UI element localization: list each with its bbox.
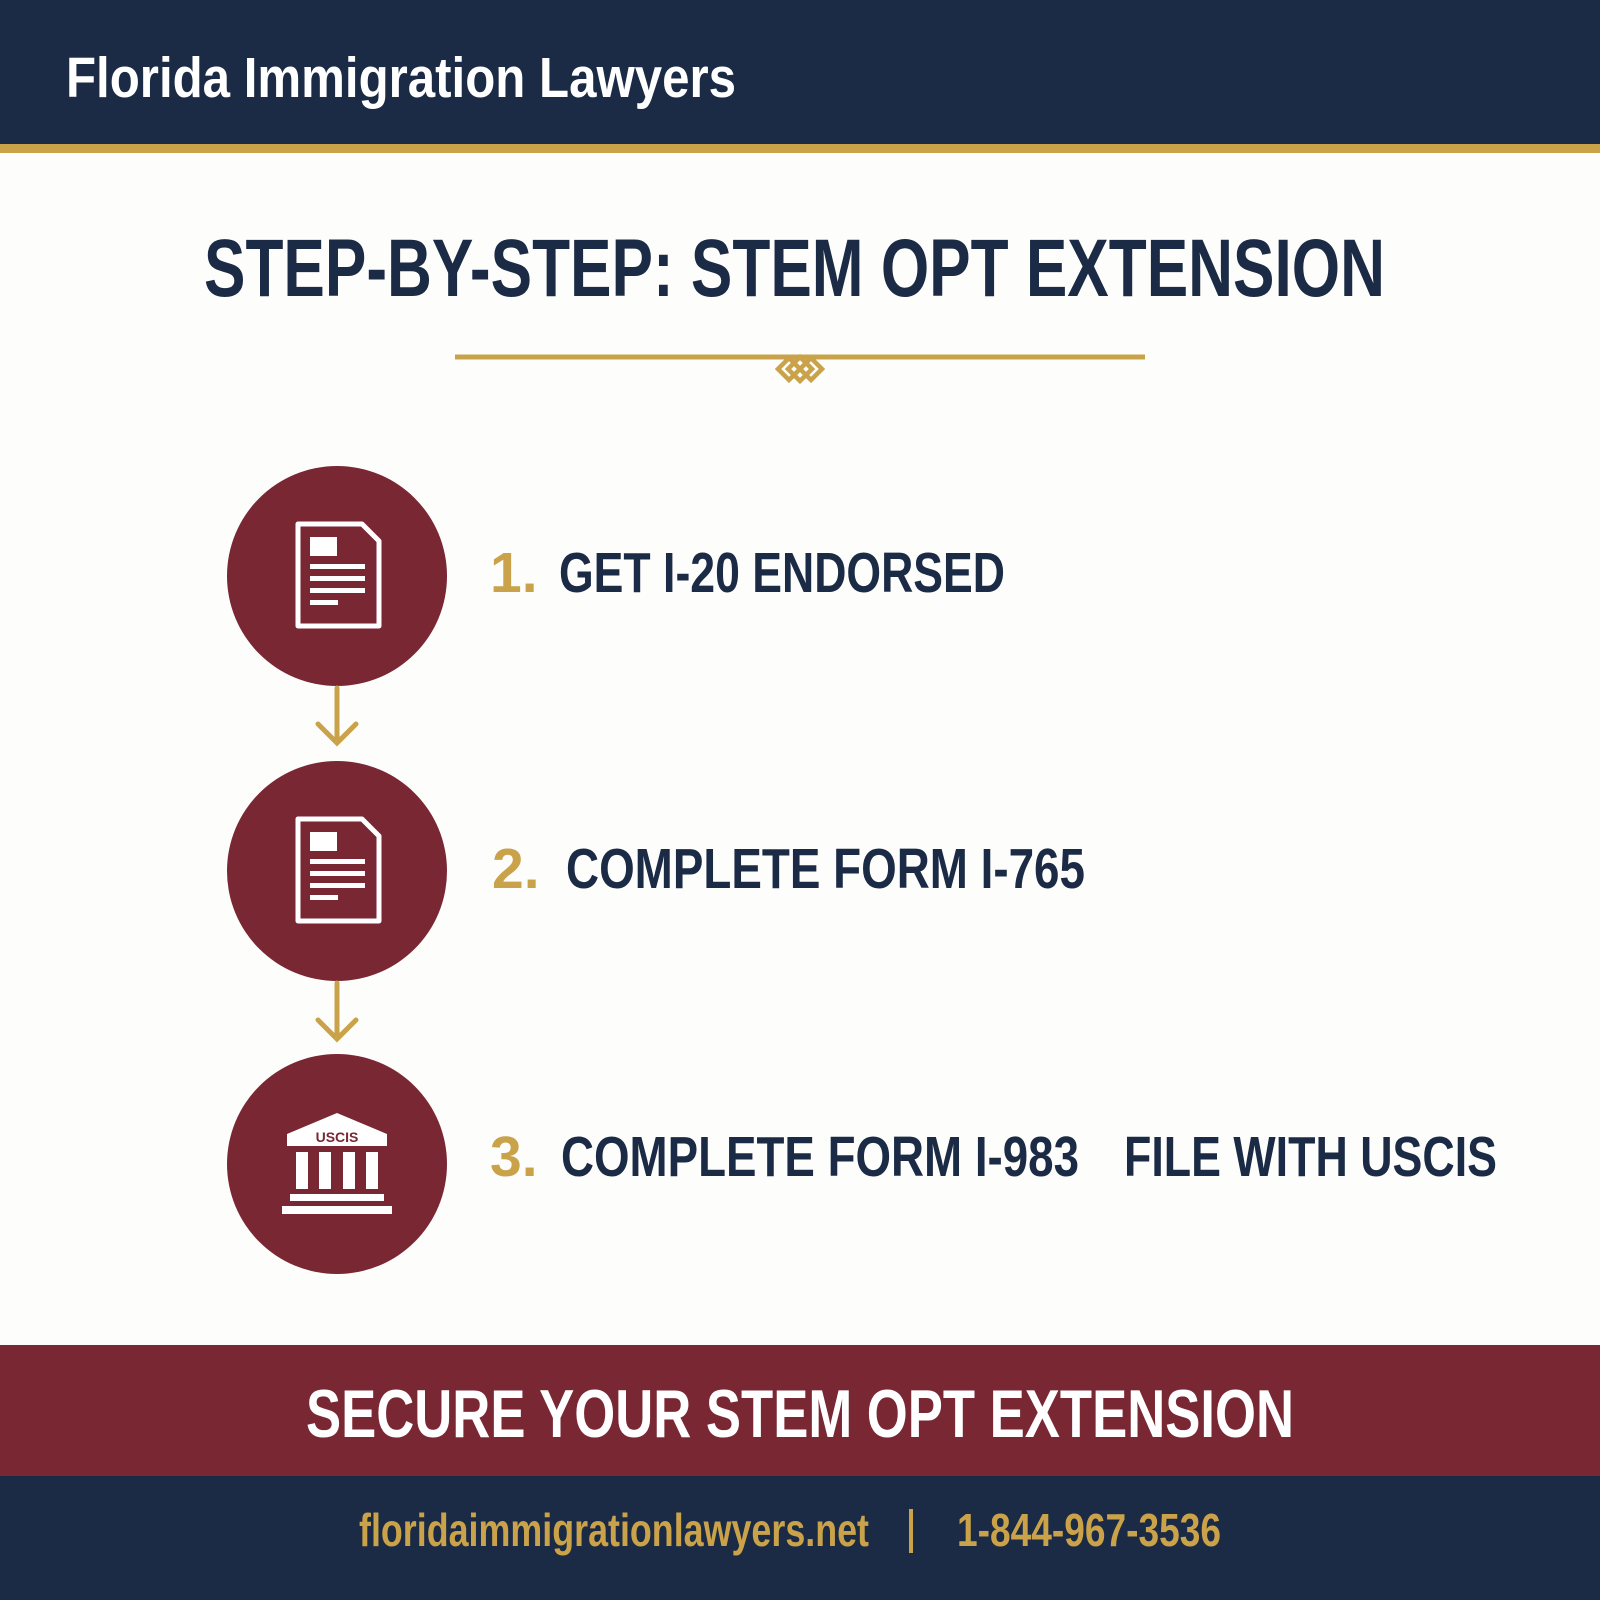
arrow 1 <box>318 688 356 743</box>
call-to-action banner: SECURE YOUR STEM OPT EXTENSION <box>306 1376 1294 1452</box>
arrow 2 <box>318 983 356 1039</box>
step 1 text <box>490 541 1005 605</box>
step 1 text: GET I-20 ENDORSED <box>559 541 1005 605</box>
step 3 icon: USCIS building <box>227 1054 447 1274</box>
step 2 text: COMPLETE FORM I-765 <box>566 837 1085 901</box>
call-to-action banner <box>0 1345 1600 1476</box>
step 2 text: 2. <box>492 837 540 901</box>
step 1 icon: document <box>227 466 447 686</box>
footer contact <box>0 1476 1600 1600</box>
step 3 text: COMPLETE FORM I-983 <box>561 1125 1079 1189</box>
footer contact: 1-844-967-3536 <box>957 1504 1221 1556</box>
header bar <box>0 0 1600 153</box>
step 3 text <box>490 1125 1497 1189</box>
step 1 text: 1. <box>490 541 538 605</box>
divider ornament <box>455 357 1145 381</box>
step 3 text: FILE WITH USCIS <box>1124 1125 1497 1189</box>
step 2 icon: document <box>227 761 447 981</box>
footer contact: floridaimmigrationlawyers.net <box>359 1504 869 1556</box>
step 3 text: 3. <box>490 1125 538 1189</box>
step 3 icon: USCIS building: USCIS <box>316 1129 358 1145</box>
header title: Florida Immigration Lawyers <box>66 46 736 110</box>
